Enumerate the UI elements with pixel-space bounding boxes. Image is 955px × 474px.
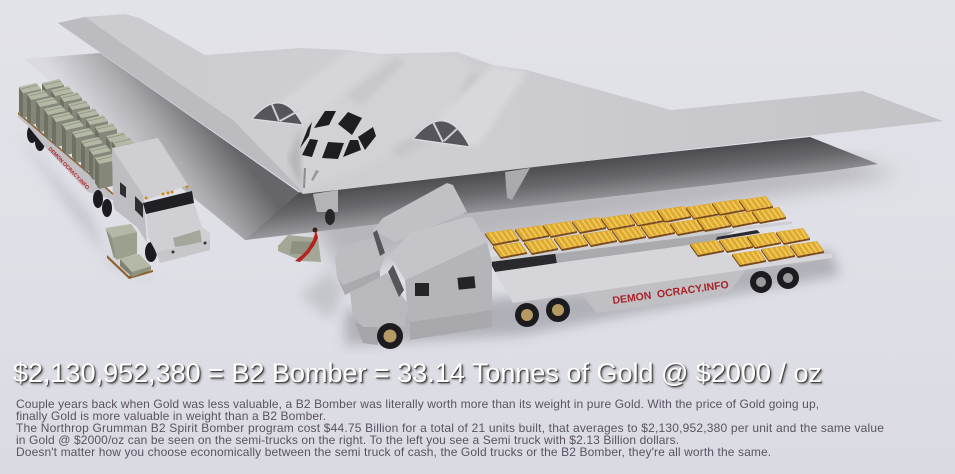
gold pallets: [690, 228, 824, 267]
trailer front wheels: [93, 190, 112, 217]
rear sleeper: [373, 183, 467, 242]
windshield: [388, 265, 404, 297]
rear windshield: [373, 230, 385, 256]
B2 bomber: [58, 14, 943, 194]
front wheel: [377, 323, 403, 349]
title: $2,130,952,380 = B2 Bomber = 33.14 Tonnes of Gold @ $2000 / oz: [13, 358, 822, 388]
cab side: [405, 242, 492, 340]
woman in red on cash couch: [278, 228, 321, 262]
hood: [146, 203, 210, 263]
windshield: [143, 191, 194, 214]
upper trailer with gold: [485, 196, 792, 272]
rear truck bumper: [337, 270, 380, 295]
nose vents: [303, 168, 306, 188]
gold truck, front: [350, 217, 832, 349]
pallet of cash by truck: [105, 224, 153, 279]
bomber ground shadow, left: [24, 53, 330, 240]
illustration: B2 bomber, cash truck and gold trucks: [18, 14, 942, 349]
hood: [350, 273, 407, 327]
soft floor shadows: [15, 130, 900, 345]
cab roof: [112, 138, 188, 200]
description text: in Gold @ $2000/oz can be seen on the semi-trucks on the right. To the left you see a Semi truck with $2.13 Billion dollars.: [16, 433, 679, 447]
grille: [173, 230, 202, 247]
right engine hump: [438, 68, 522, 144]
trailer wheels: [515, 267, 799, 327]
description text: Couple years back when Gold was less valuable, a B2 Bomber was literally worth more than its weight in pure Gold. With the price of Gold going up,: [16, 397, 819, 411]
right intake: [413, 121, 470, 147]
left engine hump: [285, 67, 334, 120]
trailer logo: DEMON OCRACY.INFO: [612, 279, 730, 307]
description text: The Northrop Grumman B2 Spirit Bomber program cost $44.75 Billion for a total of 21 units built, that averages to $2,130,952,380 per unit and the same value: [16, 421, 884, 435]
trailer: [18, 112, 113, 200]
trailer logo: DEMON OCRACY.INFO: [47, 146, 90, 191]
left leading edge band: [58, 17, 303, 194]
cash stacks inner row: [42, 79, 134, 172]
lower trailer deck: [495, 245, 832, 303]
cab side: [112, 148, 147, 243]
description text: finally Gold is more valuable in weight than a B2 Bomber.: [16, 409, 326, 423]
fuselage centre: [296, 52, 480, 190]
cab side window: [120, 182, 126, 198]
hump valley shading: [352, 62, 398, 100]
bumper: [157, 240, 210, 263]
left intake: [252, 100, 303, 125]
landing gear: [313, 168, 530, 225]
bumper: [355, 323, 378, 345]
sleeper roof: [390, 217, 487, 280]
lower trailer side: [513, 262, 747, 313]
cab windows: [457, 276, 476, 290]
soft fuselage shading: [285, 68, 522, 185]
cash stacks outer row: [19, 83, 117, 189]
front wheel: [145, 242, 157, 262]
nose side shade: [288, 134, 303, 186]
description text: Doesn't matter how you choose economically between the semi truck of cash, the Gold trucks or the B2 Bomber, they're all worth the same.: [16, 445, 771, 459]
marker lights: [144, 186, 188, 200]
wing planform: [58, 14, 943, 194]
bomber ground shadow, right: [245, 137, 878, 240]
trailer rear wheels: [27, 125, 45, 151]
rear hood: [335, 238, 385, 285]
description text: [16, 397, 884, 459]
cash truck, left: [18, 79, 210, 263]
gold truck, rear: [335, 183, 467, 295]
cockpit windows: [300, 111, 376, 159]
